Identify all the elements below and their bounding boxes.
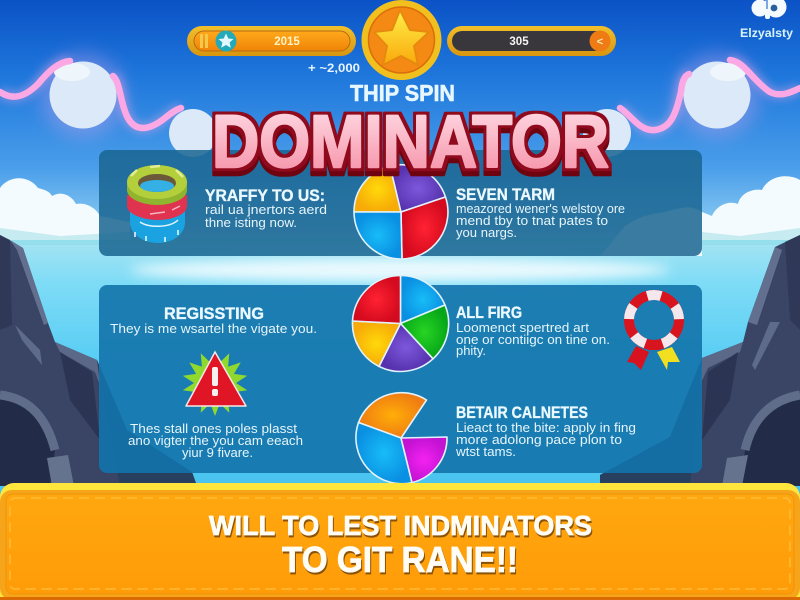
icon: stacked rings [127,165,187,243]
text block: Yraffy to us: rail ua jnertors aerd [205,202,327,217]
banner text: WILL TO LEST INDMINATORS [209,510,592,541]
score bar: right: 305 [509,36,529,48]
score bar: right: < [597,36,603,48]
text block: warning note: Thes stall ones poles plasst [130,421,297,436]
bonus value: + ~2,000 [308,61,360,75]
score bar: right [447,26,616,56]
text block: warning note: ano vigter the you cam eeach [128,433,303,448]
text block: Yraffy to us: thne isting now. [205,215,297,230]
text block: Betair calnetes [455,404,636,459]
logo [740,0,794,40]
text block: Yraffy to us [205,187,327,230]
score bar: left: 2015 [274,36,300,48]
text block: Registing: REGISSTING [164,305,264,323]
title: DOMINATOR [212,100,609,183]
text block: warning note [128,421,303,460]
text block: Betair calnetes: more adolong pace plon to [456,432,622,447]
text block: All firg [456,304,610,358]
text block: Seven tarm: you nargs. [456,225,517,240]
clouds [0,176,800,256]
chart: wheel 1 [354,165,448,259]
icon: warning triangle with burst [183,350,247,416]
text block: Seven tarm: mend tby to tnat pates to [456,213,608,228]
text block: Betair calnetes: wtst tams. [455,444,516,459]
rock cliff: left [0,235,197,486]
text block: All firg: ALL FIRG [456,304,522,322]
icon: lifebuoy ribbon badge [619,285,689,370]
text block: Registing: They is me wsartel the vigate you. [110,321,317,336]
text block: Betair calnetes: Lieact to the bite: apply in fing [456,420,636,435]
icon: star coin [362,0,442,80]
text block: All firg: phity. [456,343,486,358]
panel: lower info card [99,285,702,473]
call-to-action banner [0,483,800,600]
rock cliff: right [600,235,800,486]
pink glowing wave with bubbles: right [583,53,800,157]
chart: wheel 2 [352,275,449,371]
subtitle: THIP SPIN [350,80,455,106]
text block: warning note: yiur 9 fivare. [182,445,253,460]
text block: Yraffy to us: YRAFFY TO US: [205,187,325,205]
logo: Elzyalsty [740,28,794,40]
pink glowing wave with bubbles: left [0,53,217,157]
text block: Seven tarm: SEVEN TARM [456,186,555,204]
text block: All firg: Loomenct spertred art [456,320,589,335]
panel: upper info card [99,150,702,256]
text block: Registing [110,305,317,336]
banner text [209,510,592,580]
score bar: left [187,26,356,56]
text block: Seven tarm: meazored wener's welstoy ore [456,201,625,216]
text block: Betair calnetes: BETAIR CALNETES [456,404,588,422]
chart: wheel 3 [356,393,447,484]
banner text: TO GIT RANE!! [282,539,518,580]
text block: All firg: one or contiigc on tine on. [456,332,610,347]
text block: Seven tarm [456,186,625,240]
